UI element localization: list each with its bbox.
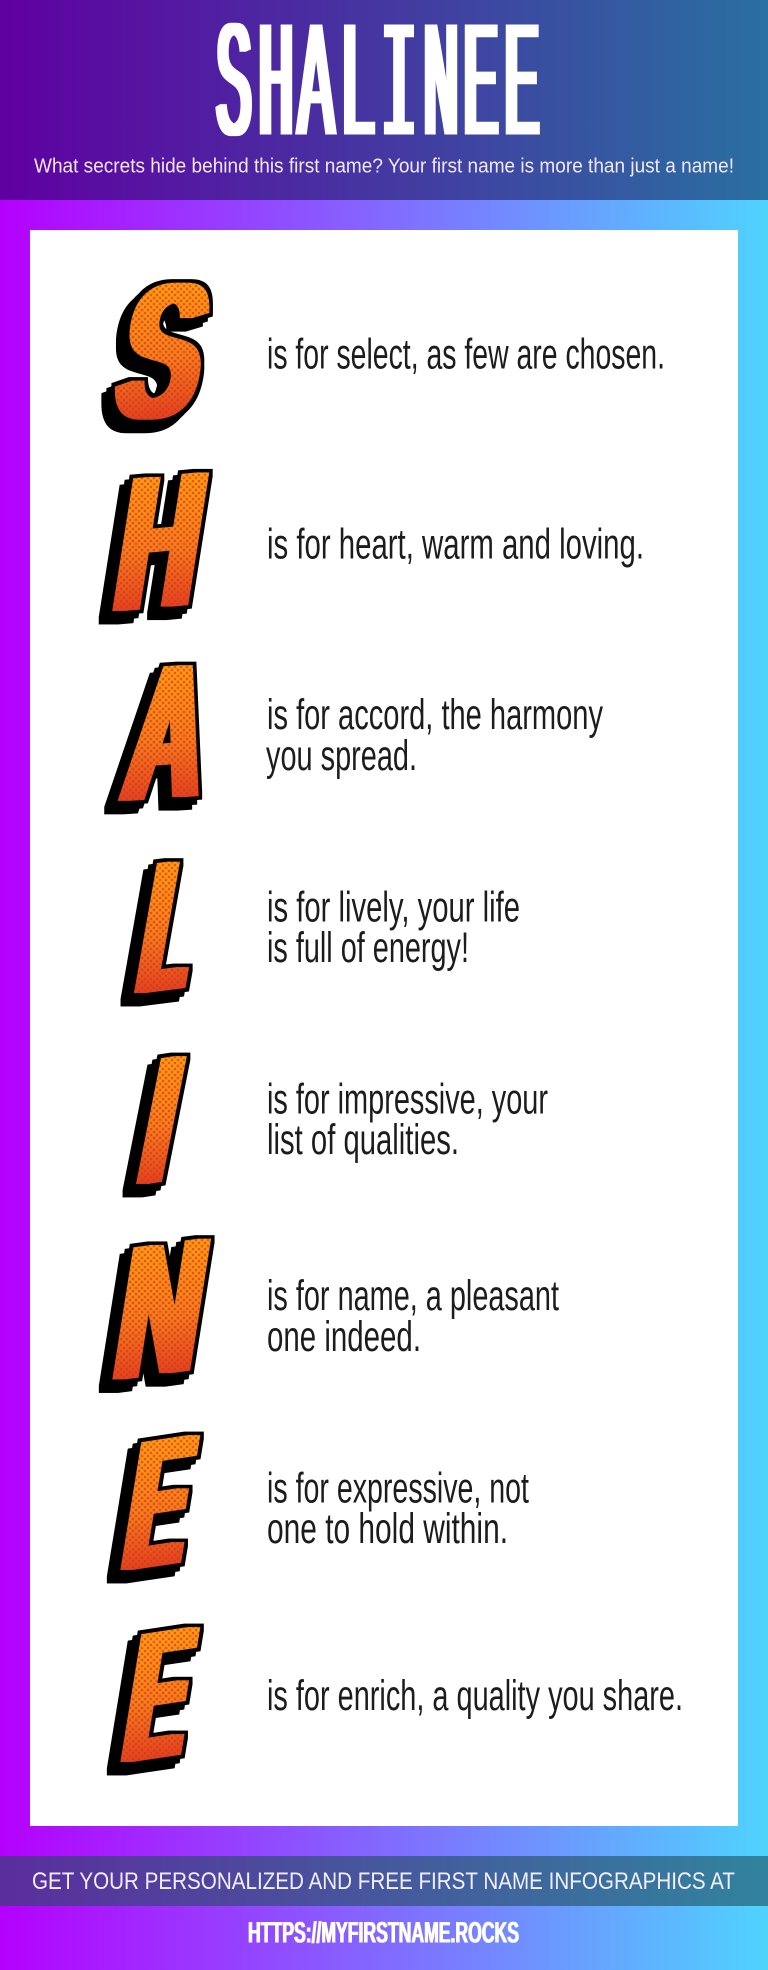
row A	[115, 623, 603, 843]
icon: comic letter A: A	[115, 623, 221, 843]
icon: comic letter N: N	[104, 1196, 219, 1422]
text: L lines: is full of energy!	[267, 924, 469, 972]
text: N lines: one indeed.	[267, 1313, 421, 1361]
row E first	[114, 1395, 529, 1611]
title: SHALINEE	[216, 0, 540, 185]
text: I lines	[267, 1076, 548, 1164]
text: A lines	[266, 691, 603, 780]
text: I lines: list of qualities.	[267, 1116, 459, 1164]
footer band	[0, 1856, 768, 1906]
text: A lines: you spread.	[266, 732, 417, 780]
text: N lines: is for name, a pleasant	[267, 1272, 559, 1320]
text: E lines: one to hold within.	[267, 1505, 508, 1553]
row N	[104, 1196, 559, 1422]
text: L lines: is for lively, your life	[267, 884, 520, 932]
text: N lines	[267, 1272, 559, 1361]
row E second	[114, 1587, 683, 1803]
text: E lines	[267, 1464, 529, 1553]
panel: white letters panel	[30, 230, 738, 1826]
icon: comic letter I: I	[128, 1015, 195, 1224]
footer url: HTTPS://MYFIRSTNAME.ROCKS	[248, 1916, 519, 1950]
row L	[127, 817, 520, 1035]
row I	[128, 1015, 548, 1224]
icon: comic letter E: E	[114, 1587, 206, 1803]
header band	[0, 0, 768, 200]
subtitle: What secrets hide behind this first name? Your first name is more than just a name!	[34, 156, 734, 178]
text: A lines: is for accord, the harmony	[267, 691, 603, 739]
text: L lines	[267, 884, 520, 972]
icon: comic letter H: H	[104, 430, 217, 653]
icon: comic letter E: E	[114, 1395, 206, 1611]
icon: comic letter L: L	[127, 817, 212, 1035]
text: E lines: is for expressive, not	[267, 1464, 529, 1512]
row H	[104, 430, 644, 653]
text: I lines: is for impressive, your	[267, 1076, 548, 1124]
icon: comic letter S: S	[103, 239, 224, 463]
row S	[103, 239, 665, 463]
